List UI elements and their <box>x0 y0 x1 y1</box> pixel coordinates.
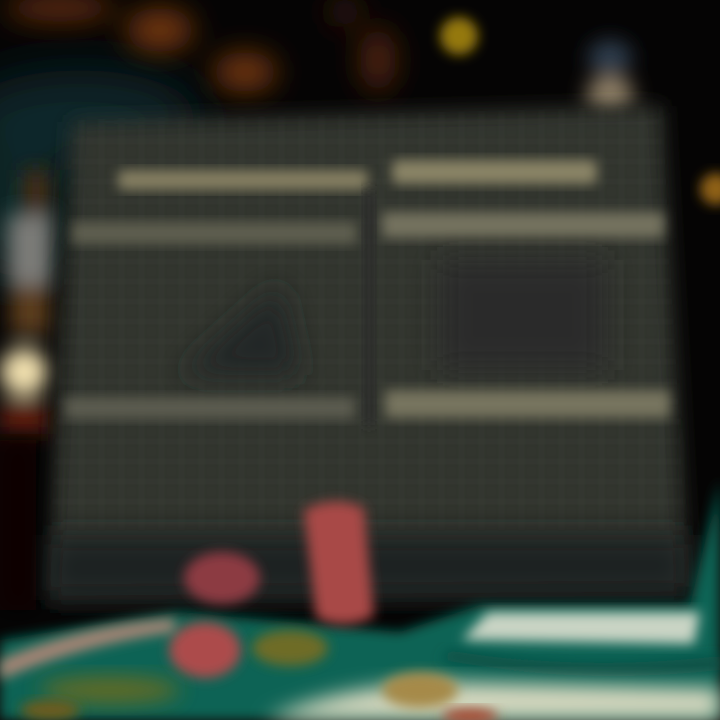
gold coins centre <box>252 630 328 666</box>
gold coins left <box>40 676 180 704</box>
right orange light <box>700 173 720 205</box>
top-left orange bokeh lights <box>5 0 396 92</box>
pink chip streak <box>0 618 175 680</box>
lower table band left <box>65 397 355 419</box>
green table <box>0 480 720 720</box>
heading text bar left <box>118 170 368 190</box>
poker chips and coins <box>0 501 374 720</box>
board lower shade <box>45 535 690 600</box>
lower table band right <box>385 390 670 418</box>
top table band right <box>382 212 664 238</box>
lower red chip stack <box>169 622 241 678</box>
red smear bottom <box>442 708 498 720</box>
middle dark grid right <box>440 260 605 370</box>
main board panel <box>45 106 690 600</box>
board body <box>48 106 688 596</box>
dark teal backdrop glow <box>0 70 200 280</box>
white card right <box>462 612 700 644</box>
top table band left <box>72 222 357 244</box>
gold coin bottom left <box>20 700 80 720</box>
heading text bar right <box>392 160 597 184</box>
tall red chip stack <box>304 501 374 625</box>
dark left table corner <box>0 440 36 610</box>
gold coin pile bottom <box>382 672 458 708</box>
dark table stripe <box>440 650 720 676</box>
yellow light <box>440 17 478 55</box>
board grid texture <box>48 106 688 530</box>
white card bottom <box>265 682 720 720</box>
bottle top at board corner <box>586 40 634 113</box>
table surface <box>0 480 720 720</box>
centre divider <box>364 190 374 425</box>
left bottle <box>0 170 52 434</box>
middle dark shape left <box>180 285 300 375</box>
short red chip stack <box>184 552 260 604</box>
